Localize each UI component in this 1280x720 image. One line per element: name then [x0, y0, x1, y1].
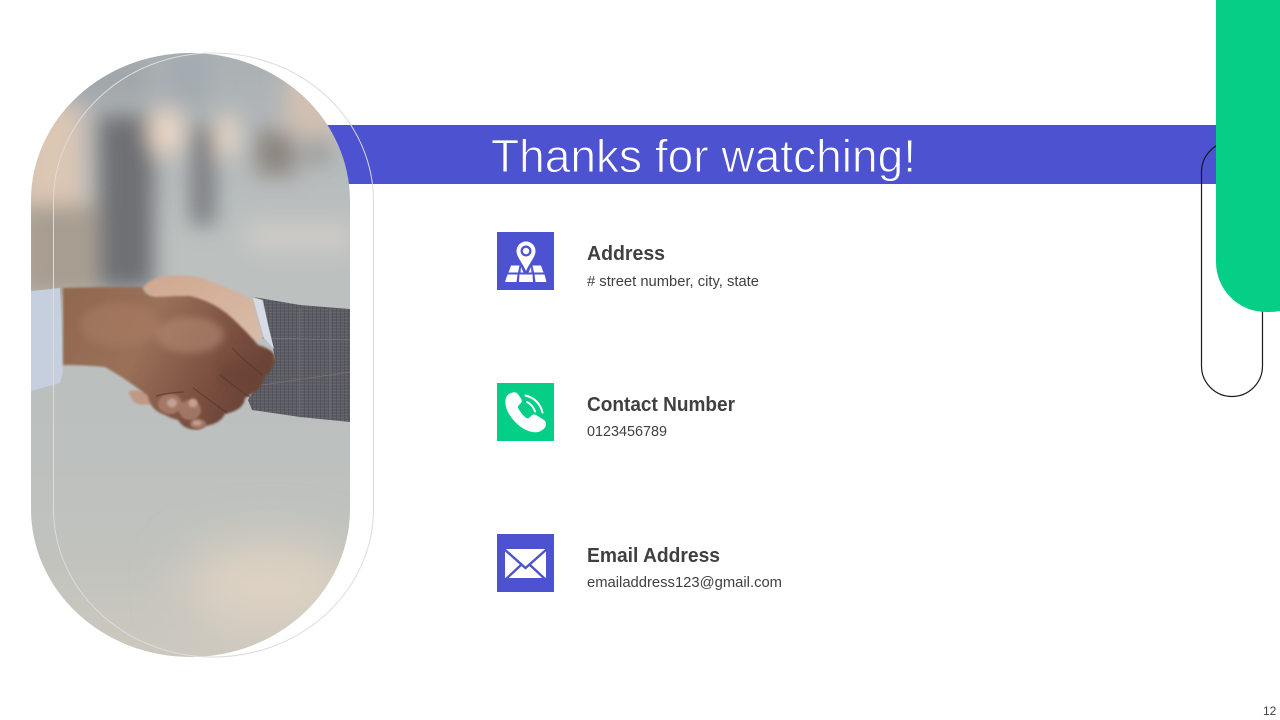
green pill accent: [1216, 0, 1280, 312]
icon: map pin: [497, 232, 554, 290]
photo: handshake: [20, 50, 355, 657]
title: Thanks for watching!: [491, 130, 916, 182]
thin pill outline over photo: [54, 53, 374, 657]
left sleeve: [31, 288, 63, 391]
heading: Contact Number: Contact Number: [587, 394, 735, 416]
icon: envelope: [497, 534, 554, 592]
contact row: phone: [497, 383, 735, 441]
heading: Email Address: Email Address: [587, 545, 720, 567]
far hand fingers: [128, 391, 152, 405]
decorative black pill outline: [1202, 142, 1262, 396]
text: phone number: 0123456789: [587, 424, 667, 440]
heading: Address: Address: [587, 243, 665, 265]
text: street: # street number, city, state: [587, 274, 759, 290]
fingers: [158, 394, 206, 429]
title banner: [320, 125, 1220, 184]
text: email: emailaddress123@gmail.com: [587, 575, 782, 591]
suit sleeve: [248, 297, 350, 422]
contact row: address: [497, 232, 759, 290]
white cuff: [253, 298, 274, 349]
icon: phone: [497, 383, 554, 441]
page number: 12: [1263, 704, 1277, 718]
contact row: email: [497, 534, 782, 592]
light hand: [143, 275, 263, 345]
dark hand: [63, 287, 275, 430]
